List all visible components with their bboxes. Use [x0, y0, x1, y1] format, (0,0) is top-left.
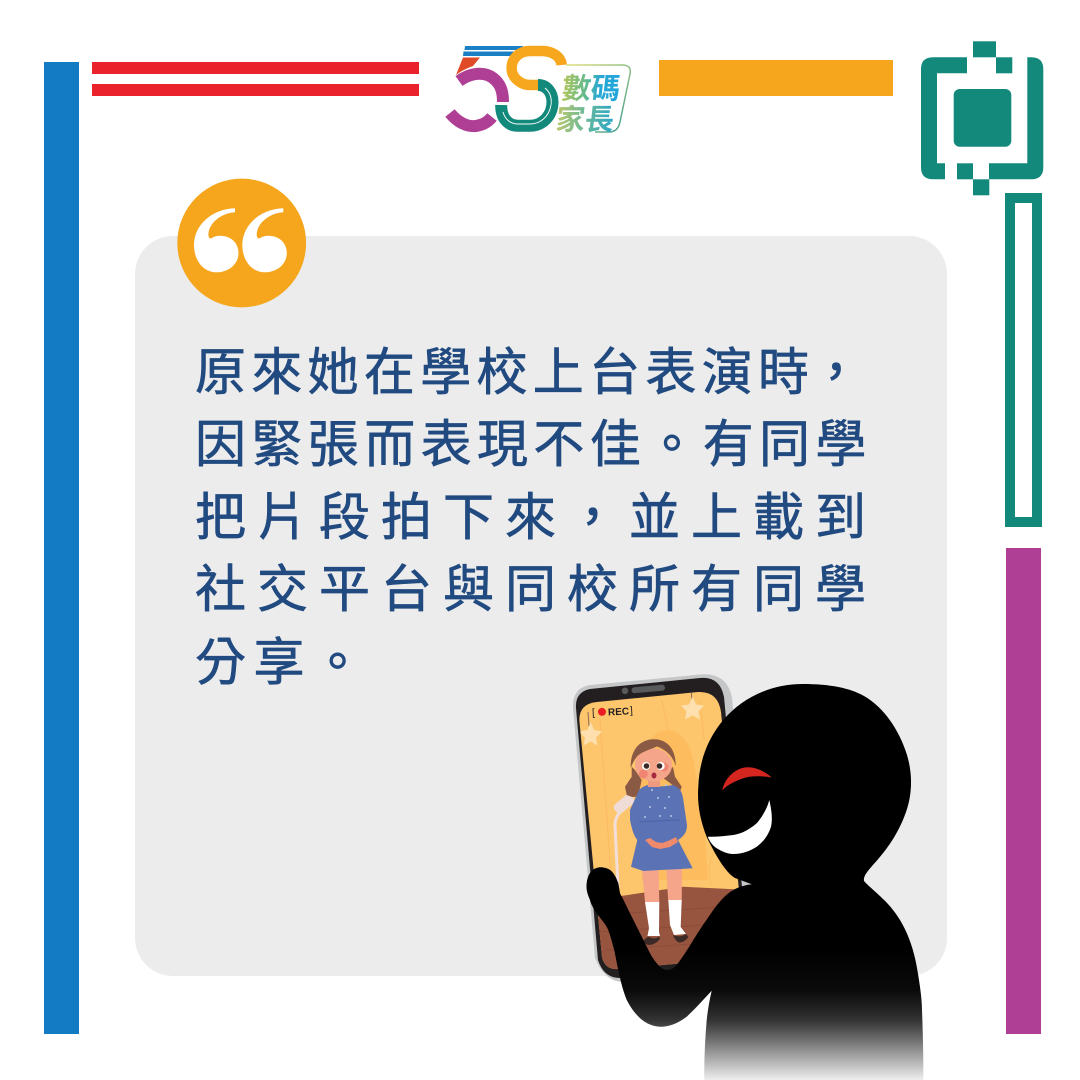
hands	[645, 837, 678, 849]
logo: 55 digital parents	[450, 46, 630, 136]
illustration: phone with girl on stage	[570, 674, 760, 985]
mouth	[652, 772, 656, 778]
logo orange curve	[512, 51, 562, 85]
icon: red eyebrow	[722, 767, 772, 790]
logo: 55 digital parents: 家長	[554, 104, 616, 136]
girl dress	[630, 785, 693, 871]
REC label: [	[592, 707, 595, 719]
stage glow	[640, 730, 708, 880]
logo red wedge	[456, 58, 480, 75]
dress dots	[644, 784, 672, 818]
logo purple arcs	[459, 74, 503, 102]
silhouette body	[586, 684, 923, 1080]
girl hair braids	[625, 767, 642, 797]
text block: quote: 社交平台與同校所有同學	[195, 561, 877, 618]
teal outlined bar	[1004, 193, 1042, 527]
girl shoes	[644, 936, 660, 945]
logo text: 數碼	[560, 73, 622, 105]
girl face	[635, 748, 672, 782]
stars	[579, 722, 602, 746]
logo outline	[566, 65, 630, 132]
illustration: black silhouette	[586, 684, 923, 1080]
text block: quote: 原來她在學校上台表演時，	[195, 344, 867, 401]
mic stand	[614, 813, 622, 888]
phone screen	[579, 692, 739, 970]
girl socks	[645, 902, 660, 936]
camera and speaker	[622, 688, 628, 694]
logo teal curve	[501, 85, 552, 126]
purple bar right	[1006, 548, 1041, 1034]
girl hair	[631, 739, 676, 768]
orange bar	[659, 60, 893, 96]
REC label	[592, 705, 633, 719]
text block: quote: 因緊張而表現不佳。有同學	[195, 416, 872, 473]
text block: quote: 把片段拍下來，並上載到	[195, 489, 877, 546]
mic head	[614, 794, 634, 814]
REC label: ]	[630, 705, 633, 717]
eyes	[642, 762, 650, 770]
icon: white grin	[708, 800, 772, 854]
panel: grey quote background	[135, 236, 947, 976]
logo blue stripes	[463, 46, 524, 56]
blush	[639, 770, 648, 778]
blue bar left	[44, 62, 79, 1034]
girl legs	[642, 870, 660, 902]
REC label: REC	[608, 706, 629, 718]
text block: quote: 分享。	[195, 634, 371, 691]
text block: quote	[195, 344, 877, 691]
dress waist line	[639, 820, 680, 822]
stage floor	[598, 886, 735, 970]
red double bar	[92, 62, 419, 96]
icon: teal pixel frame	[921, 41, 1043, 195]
star strings	[588, 690, 692, 726]
phone body	[573, 674, 760, 982]
icon: quote badge	[177, 179, 306, 307]
girl neck	[648, 780, 660, 787]
